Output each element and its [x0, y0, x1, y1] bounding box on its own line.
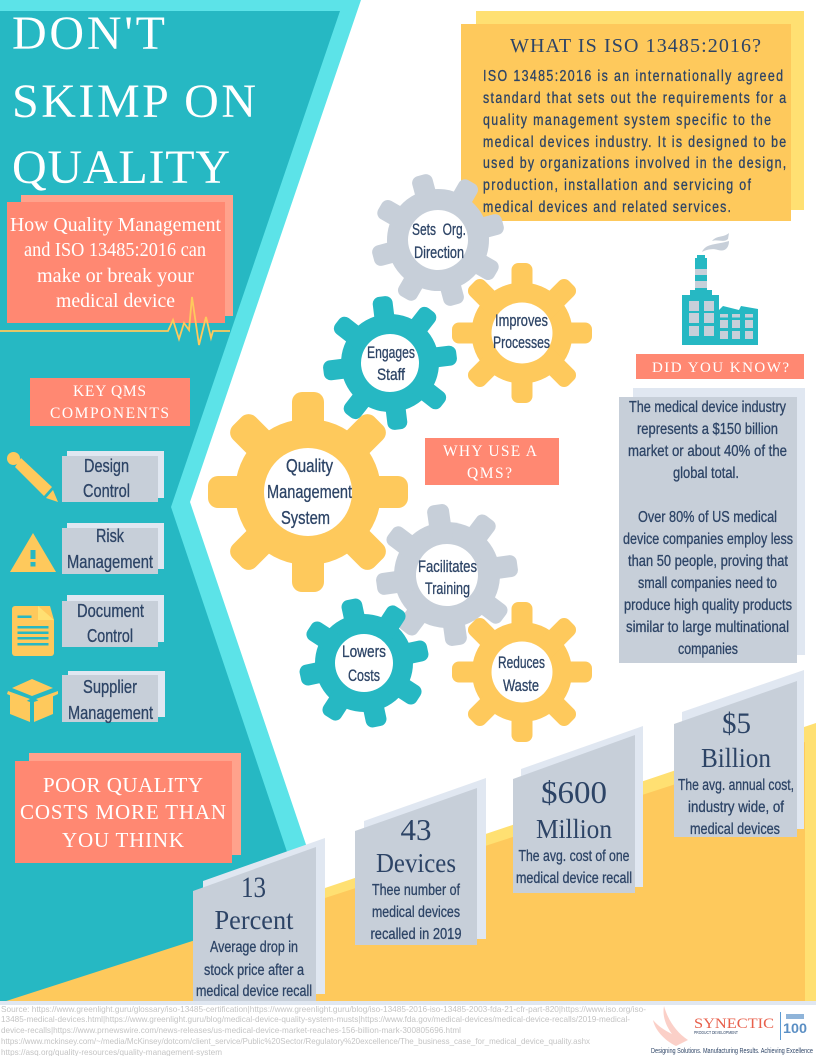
stat card: 600 million: $600: [541, 774, 607, 810]
heading: why use a QMS: QMS?: [467, 465, 512, 482]
heading: key QMS components: KEY QMS: [73, 383, 146, 400]
panel: did you know facts: market or about 40% of the: [628, 443, 787, 460]
stat card: 43 devices: [355, 778, 486, 945]
card: risk management: Risk: [96, 526, 125, 546]
stat card: 43 devices: recalled in 2019: [370, 926, 462, 943]
text: ISO description: medical devices industry. It is designed to be: [483, 133, 786, 150]
gear: reduces waste: [452, 602, 592, 742]
callout: poor quality costs: COSTS MORE THAN: [20, 800, 226, 824]
panel: did you know facts: companies: [678, 641, 738, 658]
text: ISO description: standard that sets out the requirements for a: [483, 89, 786, 106]
card: design control: Design: [84, 456, 129, 476]
stat card: 43 devices: Thee number of: [372, 882, 460, 899]
stat card: 600 million: medical device recall: [516, 870, 632, 887]
heading: key QMS components: [30, 378, 190, 426]
stat card: 5 billion: [674, 670, 804, 838]
icon: warning triangle: [10, 533, 56, 572]
text: sources: 13485-medical-devices.html|https://www.greenlight.guru/blog/medical-device-quality-system-musts|https://www.fda.gov/medical-devices/medical-device-recalls/2019-medical-: [1, 1014, 630, 1024]
background: teal panel: [0, 11, 340, 1005]
callout: poor quality costs: YOU THINK: [62, 828, 184, 852]
background: light yellow band: [193, 723, 816, 1001]
logo: Synectic: SYNECTIC: [694, 1016, 774, 1032]
text: sources: Source: https://www.greenlight.guru/glossary/iso-13485-certification|https://www.greenlight.guru/blog/iso-13485-2016-iso-13485-2003-fda-21-cfr-part-820|https://www.iso.org/iso-: [1, 1004, 646, 1014]
text: sources: device-recalls|https://www.prnewswire.com/news-releases/us-medical-device-market-reaches-156-billion-mark-300805696.html: [1, 1025, 461, 1035]
gear: sets org direction: [356, 158, 520, 322]
card: risk management: [62, 523, 164, 574]
stat card: 5 billion: $5: [722, 707, 751, 740]
icon: document: [12, 606, 54, 656]
text: ISO description: [483, 67, 786, 215]
title: SKIMP ON: [12, 75, 256, 128]
gear: lowers costs: [287, 586, 441, 740]
stat card: 13 percent: stock price after a: [204, 962, 304, 979]
stat card: 5 billion: industry wide, of: [688, 799, 784, 816]
gear: engages staff: Engages: [367, 343, 415, 362]
stat card: 600 million: The avg. cost of one: [518, 848, 630, 865]
logo: Synectic: 100: [783, 1020, 807, 1036]
subtitle panel: make or break your: [37, 265, 194, 287]
text: ISO description: quality management system specific to the: [483, 111, 771, 128]
heading: why use a QMS: WHY USE A: [443, 443, 538, 460]
card: supplier management: Supplier: [83, 677, 137, 697]
stat card: 600 million: [513, 726, 643, 893]
panel: did you know facts: represents a $150 billion: [637, 421, 778, 438]
panel: did you know facts: global total.: [673, 465, 739, 482]
gear: sets org direction: Sets Org.: [412, 220, 466, 239]
stat card: 13 percent: medical device recall: [196, 983, 312, 1000]
heading: what is ISO: WHAT IS ISO 13485:2016?: [510, 35, 761, 57]
gear: facilitates training: [367, 495, 527, 655]
card: supplier management: Management: [68, 703, 153, 723]
stat card: 600 million: Million: [536, 814, 612, 844]
subtitle panel: How Quality Management: [10, 214, 221, 236]
title: [12, 7, 256, 194]
card: risk management: Management: [67, 552, 153, 572]
gear: reduces waste: Waste: [503, 676, 539, 695]
panel: did you know facts: small companies need to: [638, 575, 777, 592]
text: ISO description: used by organizations involved in the design,: [483, 154, 786, 171]
stat card: 5 billion: medical devices: [690, 821, 780, 838]
card: design control: [62, 451, 164, 502]
stat card: 13 percent: [193, 838, 325, 1001]
logo: Synectic: PRODUCT DEVELOPMENT: [694, 1030, 738, 1035]
card: document control: [62, 595, 164, 647]
icon: pencil: [7, 452, 58, 502]
stat card: 13 percent: Average drop in: [210, 939, 298, 956]
heading: did you know: DID YOU KNOW?: [652, 360, 789, 376]
gear: quality management system: Quality: [286, 456, 333, 476]
text: ISO description: ISO 13485:2016 is an internationally agreed: [483, 67, 783, 84]
stat card: 43 devices: medical devices: [372, 904, 460, 921]
heading: key QMS components: COMPONENTS: [50, 405, 169, 422]
title: DON'T: [12, 7, 165, 60]
callout: poor quality costs: POOR QUALITY: [43, 773, 203, 797]
text: sources: [1, 1004, 646, 1056]
gear: facilitates training: Training: [425, 579, 470, 598]
gear: quality management system: Management: [267, 482, 352, 502]
card: design control: Control: [83, 481, 130, 501]
icon: box: [7, 679, 58, 722]
gear: quality management system: System: [281, 508, 330, 528]
gear: lowers costs: Costs: [348, 666, 380, 685]
callout: poor quality costs: [15, 753, 241, 863]
gear: improves processes: Processes: [493, 333, 550, 352]
stat card: 13 percent: Percent: [214, 905, 294, 935]
subtitle panel: medical device: [56, 290, 175, 312]
panel: what is ISO: [461, 11, 804, 221]
background: light teal frame: [0, 0, 361, 1005]
gear: lowers costs: Lowers: [342, 642, 386, 661]
subtitle panel: and ISO 13485:2016 can: [24, 239, 206, 261]
gear: engages staff: [315, 288, 465, 438]
gear: improves processes: Improves: [495, 311, 548, 330]
card: document control: Document: [77, 601, 144, 621]
heading: did you know: [636, 354, 804, 379]
gear: reduces waste: Reduces: [498, 653, 545, 672]
text: sources: https://www.mckinsey.com/~/media/McKinsey/dotcom/client_service/Public%20Sector/Regulatory%20excellence/The_business_case_for_medical_device_quality.ashx: [1, 1036, 591, 1046]
panel: did you know facts: Over 80% of US medical: [638, 509, 777, 526]
gear: improves processes: [452, 263, 592, 403]
gear: engages staff: Staff: [377, 365, 405, 384]
gear: quality management system: [208, 392, 408, 592]
title: QUALITY: [12, 141, 230, 194]
icon: factory: [682, 233, 758, 345]
stat card: 13 percent: 13: [241, 871, 266, 904]
gear: facilitates training: Facilitates: [418, 557, 477, 576]
background: yellow ground: [0, 742, 805, 1003]
stat card: 5 billion: Billion: [701, 743, 771, 773]
panel: did you know facts: [619, 388, 805, 663]
stat card: 43 devices: Devices: [376, 848, 456, 878]
stat card: 43 devices: 43: [400, 812, 432, 847]
subtitle panel: [7, 195, 233, 323]
card: supplier management: [62, 671, 165, 723]
logo: Synectic: [651, 1006, 813, 1055]
card: document control: Control: [87, 626, 133, 646]
heartbeat line: [0, 297, 230, 345]
text: ISO description: medical devices and related services.: [483, 198, 731, 215]
text: ISO description: production, installation and servicing of: [483, 176, 751, 193]
heading: why use a QMS: [425, 438, 559, 485]
gear: sets org direction: Direction: [414, 243, 464, 262]
